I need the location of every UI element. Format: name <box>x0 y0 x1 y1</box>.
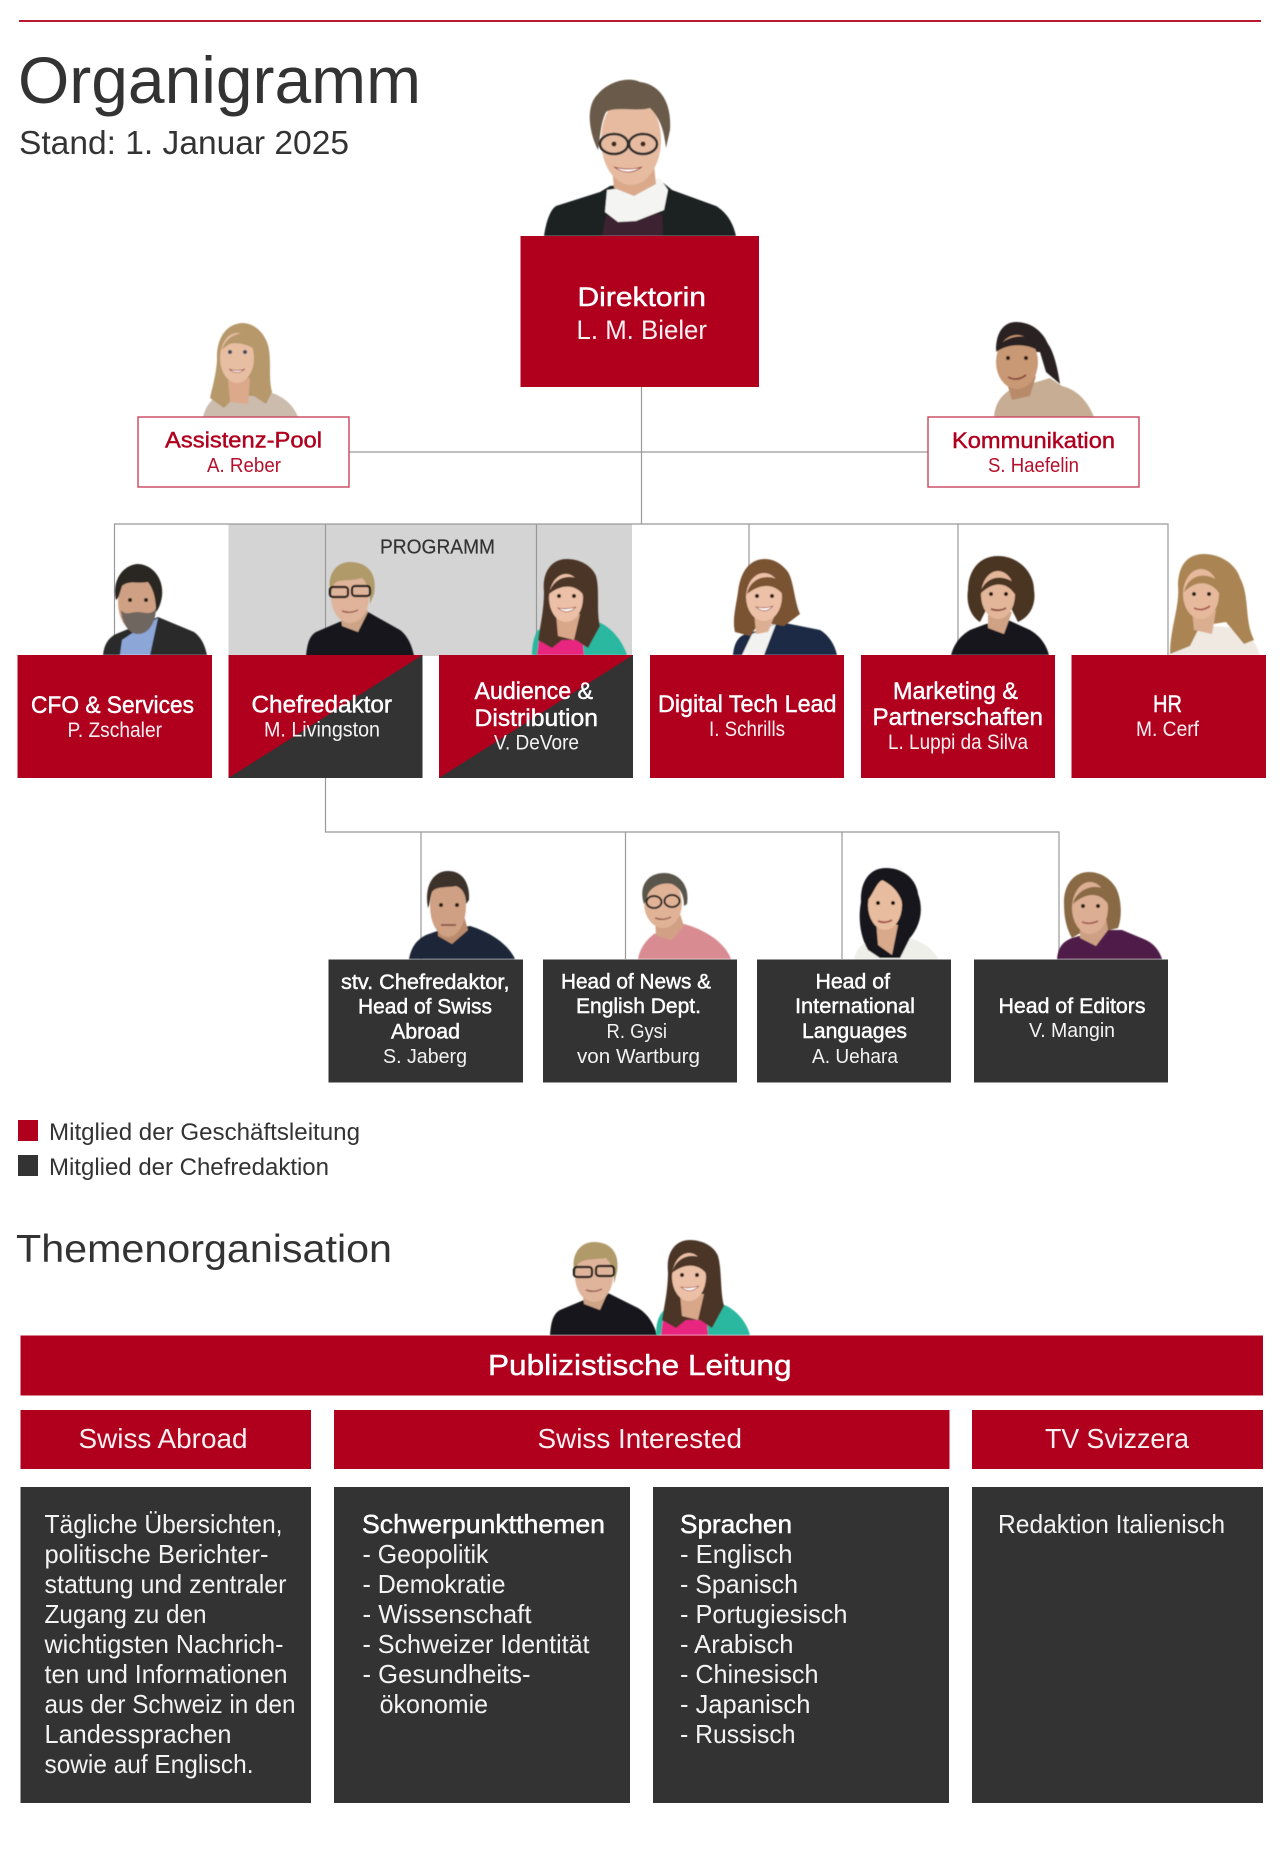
panel: Swiss Abroad description: aus der Schweiz in den <box>44 1689 296 1719</box>
photo: A. Uehara <box>854 868 938 959</box>
panel: Sprachen: - Arabisch <box>680 1629 794 1659</box>
photo: R. Gysi <box>638 873 731 959</box>
panel: Chefredaktor: Chefredaktor <box>252 692 392 718</box>
panel: Swiss Abroad description: Zugang zu den <box>44 1599 206 1629</box>
legend item: Chefredaktion: Mitglied der Chefredaktion <box>49 1154 329 1181</box>
panel: Kommunikation: S. Haefelin <box>988 454 1079 477</box>
panel: Schwerpunktthemen: ökonomie <box>380 1689 488 1719</box>
panel: Head of News & English Dept.: English Dept. <box>576 994 701 1018</box>
header: Swiss Abroad <box>20 1410 311 1469</box>
panel: CFO & Services: P. Zschaler <box>68 719 162 742</box>
panel: Head of News & English Dept.: von Wartburg <box>577 1045 700 1068</box>
panel: Digital Tech Lead: I. Schrills <box>709 718 785 741</box>
panel: Assistenz-Pool: A. Reber <box>207 454 281 477</box>
panel: Head of International Languages <box>757 960 951 1082</box>
photo: M. Cerf <box>1169 554 1260 655</box>
panel: Sprachen: - Spanisch <box>680 1569 798 1599</box>
subtitle: date: Stand: 1. Januar 2025 <box>19 124 349 161</box>
panel: stv. Chefredaktor: stv. Chefredaktor, <box>341 970 510 994</box>
panel: Head of News & English Dept.: R. Gysi <box>606 1020 667 1043</box>
header: Swiss Abroad: Swiss Abroad <box>78 1423 248 1454</box>
panel: Kommunikation: Kommunikation <box>952 428 1115 453</box>
panel: Direktorin: Direktorin <box>578 282 706 312</box>
photo: V. Mangin <box>1057 872 1162 959</box>
panel: Direktorin: L. M. Bieler <box>576 315 707 345</box>
panel: Chefredaktor: M. Livingston <box>264 718 380 742</box>
heading: Themenorganisation: Themenorganisation <box>16 1228 392 1271</box>
panel: HR: M. Cerf <box>1136 718 1199 741</box>
panel: Swiss Abroad description: sowie auf Englisch. <box>44 1749 254 1779</box>
bar: Publizistische Leitung: Publizistische Leitung <box>488 1350 792 1382</box>
panel: Swiss Abroad description: stattung und zentraler <box>44 1569 287 1599</box>
panel: stv. Chefredaktor: S. Jaberg <box>383 1045 467 1068</box>
header: TV Svizzera <box>972 1410 1263 1469</box>
panel: Chefredaktor <box>228 655 422 778</box>
panel: Marketing & Partnerschaften: L. Luppi da Silva <box>888 731 1028 754</box>
photo: V. DeVore <box>532 559 627 655</box>
panel: Audience & Distribution: Audience & <box>474 678 593 705</box>
panel: Direktorin <box>520 236 759 387</box>
photo: S. Jaberg <box>409 871 515 959</box>
panel: CFO & Services <box>18 655 212 778</box>
panel: Schwerpunktthemen: - Geopolitik <box>362 1539 489 1569</box>
photo: P. Zschaler <box>103 564 207 655</box>
panel: Swiss Abroad description: ten und Informationen <box>44 1659 288 1689</box>
header: TV Svizzera: TV Svizzera <box>1045 1423 1189 1454</box>
panel: Audience & Distribution <box>439 655 633 778</box>
panel: Sprachen: - Chinesisch <box>680 1659 818 1689</box>
panel: stv. Chefredaktor: Head of Swiss <box>358 994 492 1018</box>
panel: Sprachen: - Japanisch <box>680 1689 810 1719</box>
connector lines <box>114 387 1168 959</box>
panel: Head of International Languages: International <box>795 994 915 1018</box>
panel: Schwerpunktthemen: - Schweizer Identität <box>362 1629 590 1659</box>
panel: Schwerpunktthemen: - Wissenschaft <box>362 1599 532 1629</box>
panel: Schwerpunktthemen: - Gesundheits- <box>362 1659 530 1689</box>
header: Swiss Interested: Swiss Interested <box>538 1423 742 1454</box>
photo: M. Livingston small <box>550 1242 657 1335</box>
panel: Marketing & Partnerschaften <box>861 655 1055 778</box>
panel: Assistenz-Pool: Assistenz-Pool <box>165 428 322 452</box>
panel: Audience & Distribution: Distribution <box>474 705 598 732</box>
panel: Head of International Languages: Languages <box>802 1019 907 1043</box>
panel: Marketing & Partnerschaften: Partnerschaften <box>872 704 1043 731</box>
photo: I. Schrills <box>733 559 837 655</box>
panel: Sprachen <box>653 1487 949 1803</box>
panel: Head of News & English Dept. <box>543 960 737 1082</box>
label: programm: PROGRAMM <box>380 536 495 558</box>
photo: M. Livingston <box>306 562 414 656</box>
panel: Redaktion Italienisch <box>972 1487 1263 1803</box>
panel: Swiss Abroad description: wichtigsten Nachrich- <box>44 1629 283 1659</box>
panel: Sprachen: Sprachen <box>680 1509 792 1539</box>
photo: V. DeVore small <box>656 1240 750 1335</box>
panel: Audience & Distribution: V. DeVore <box>494 732 579 754</box>
panel: Schwerpunktthemen: Schwerpunktthemen <box>362 1509 605 1539</box>
panel: Swiss Abroad description: Tägliche Übersichten, <box>44 1509 282 1539</box>
panel: Kommunikation <box>928 417 1139 487</box>
panel: Schwerpunktthemen: - Demokratie <box>362 1569 506 1599</box>
panel: Head of News & English Dept.: Head of News & <box>561 970 711 994</box>
header: Swiss Interested <box>334 1410 950 1469</box>
panel: Assistenz-Pool <box>138 417 349 487</box>
panel: Swiss Abroad description: Landessprachen <box>44 1719 232 1749</box>
legend <box>18 1119 360 1181</box>
panel: Swiss Abroad description: politische Berichter- <box>44 1539 268 1569</box>
panel: Digital Tech Lead: Digital Tech Lead <box>658 691 836 718</box>
photo: S. Haefelin <box>994 322 1094 417</box>
panel: HR <box>1072 655 1266 778</box>
panel: HR: HR <box>1153 691 1182 718</box>
panel: Head of Editors: V. Mangin <box>1029 1019 1115 1042</box>
panel: stv. Chefredaktor: Abroad <box>391 1020 460 1044</box>
panel: stv. Chefredaktor <box>328 960 523 1082</box>
legend item: Geschäftsleitung: Mitglied der Geschäftsleitung <box>49 1119 360 1146</box>
title: Organigramm <box>18 43 421 117</box>
panel: Redaktion Italienisch: Redaktion Italienisch <box>998 1509 1225 1539</box>
panel: Head of Editors: Head of Editors <box>998 994 1146 1018</box>
bar: Publizistische Leitung <box>20 1336 1263 1396</box>
panel: CFO & Services: CFO & Services <box>31 692 194 719</box>
panel: Head of International Languages: A. Uehara <box>812 1045 899 1068</box>
photo: L. M. Bieler <box>544 80 736 236</box>
panel: programm background <box>228 524 632 656</box>
panel: Sprachen: - Portugiesisch <box>680 1599 848 1629</box>
panel: Schwerpunktthemen <box>334 1487 630 1803</box>
photo: A. Reber <box>203 323 298 417</box>
panel: Head of Editors <box>974 960 1168 1082</box>
panel: Swiss Abroad description <box>20 1487 311 1803</box>
panel: Sprachen: - Russisch <box>680 1719 796 1749</box>
panel: Head of International Languages: Head of <box>816 970 890 994</box>
panel: Digital Tech Lead <box>650 655 844 778</box>
panel: Sprachen: - Englisch <box>680 1539 792 1569</box>
photo: L. Luppi da Silva <box>951 556 1049 655</box>
panel: Marketing & Partnerschaften: Marketing & <box>893 678 1018 705</box>
